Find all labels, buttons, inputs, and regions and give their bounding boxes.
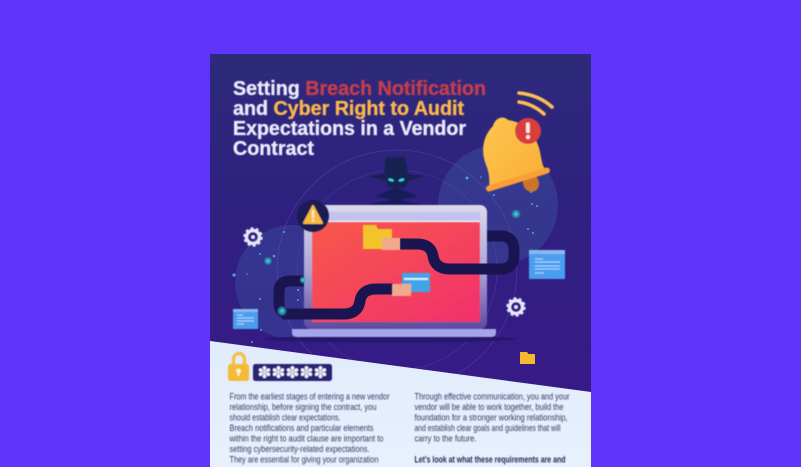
laptop frame bbox=[304, 205, 487, 329]
text block: left column: within the right to audit clause are important to bbox=[229, 434, 384, 444]
password field: ✽✽✽✽✽ bbox=[258, 363, 328, 382]
text block: left column: setting cybersecurity-related expectations. bbox=[230, 444, 370, 454]
text block: left column bbox=[229, 392, 390, 464]
text block: left column: relationship, before signing the contract, you bbox=[230, 402, 377, 412]
text block: right column: and establish clear goals and guidelines that will bbox=[414, 423, 561, 433]
decorative background blobs and orbit rings bbox=[235, 145, 558, 390]
cable: back loop left bbox=[279, 281, 310, 314]
laptop base bbox=[292, 329, 496, 337]
icon: small folder bbox=[520, 352, 535, 364]
laptop bbox=[292, 205, 496, 337]
text block: right column: Through effective communication, you and your bbox=[414, 392, 570, 402]
icon: message window on screen bbox=[392, 273, 430, 296]
icon: notification bell bbox=[483, 93, 552, 194]
icon: left gear bbox=[244, 228, 262, 246]
icon: folder on screen bbox=[363, 225, 400, 250]
text block: left column: should establish clear expectations. bbox=[230, 412, 340, 422]
text block: right column: carry to the future. bbox=[414, 434, 476, 444]
text block: left column: Breach notifications and particular elements bbox=[230, 423, 374, 433]
glowing network dots bbox=[232, 176, 538, 343]
text block: left column: From the earliest stages of entering a new vendor bbox=[230, 392, 390, 402]
icon: left document window bbox=[233, 309, 258, 329]
icon: warning badge bbox=[297, 200, 329, 232]
laptop screen bbox=[312, 222, 480, 322]
text block: right column: foundation for a stronger working relationship, bbox=[414, 412, 568, 422]
title: and Cyber Right to Audit bbox=[233, 98, 464, 120]
cable: back loop right bbox=[475, 236, 514, 269]
title: Setting Breach Notification bbox=[233, 78, 486, 100]
icon: padlock bbox=[228, 354, 249, 381]
cable: lower hand to left bbox=[282, 289, 393, 314]
title: Expectations in a Vendor bbox=[233, 118, 466, 140]
laptop shadow bbox=[264, 336, 516, 342]
panel: infographic dark header bbox=[210, 54, 591, 467]
panel: light text section bbox=[210, 341, 591, 467]
laptop title bar bbox=[312, 212, 480, 222]
title: Contract bbox=[233, 138, 314, 160]
title bbox=[233, 78, 486, 160]
text block: left column: They are essential for giving your organization bbox=[230, 454, 379, 464]
text block: right column bbox=[414, 392, 570, 464]
icon: hacker silhouette bbox=[367, 157, 425, 205]
text block: right column: vendor will be able to work together, build the bbox=[414, 402, 564, 412]
icon: right document window bbox=[529, 250, 565, 279]
icon: right gear bbox=[508, 298, 524, 316]
cable: top hand to right bbox=[400, 244, 505, 269]
text block: right column: Let's look at what these requirements are and bbox=[414, 454, 566, 464]
